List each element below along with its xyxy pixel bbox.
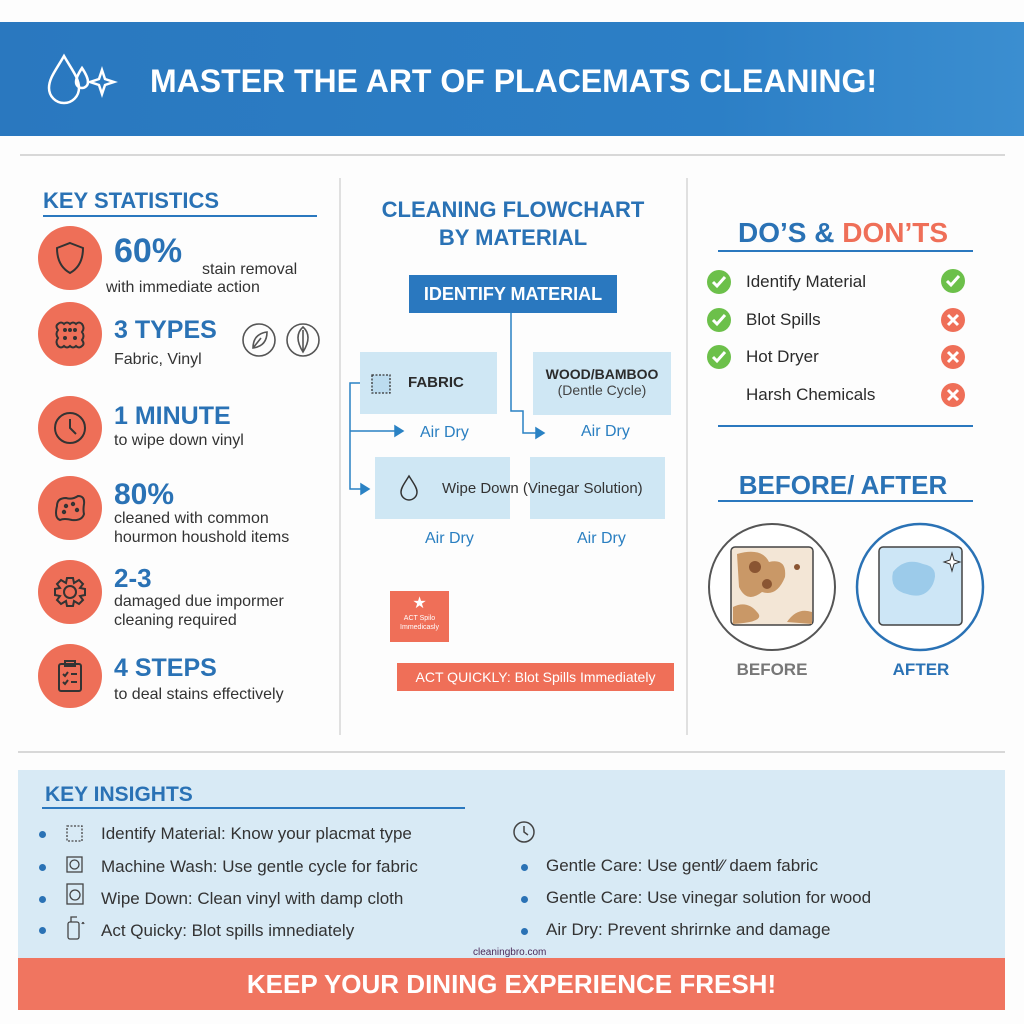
wipe down boxes: [375, 457, 510, 519]
panel: flowchart: Wipe Down (Vinegar Solution): [442, 480, 643, 497]
stat: 2-3: 2-3: [114, 563, 152, 593]
insight list right: Gentle Care: Use vinegar solution for wood: [546, 888, 871, 907]
do/don't rows: [707, 269, 965, 407]
panel: flowchart: Air Dry: [420, 424, 469, 441]
heading: key insights: KEY INSIGHTS: [45, 783, 193, 806]
stat: 60%: 60%: [114, 232, 182, 270]
stat: 3 types: [38, 302, 320, 368]
panel: flowchart: Air Dry: [581, 423, 630, 440]
fabric box: [360, 352, 497, 414]
stat: 1 minute: 1 MINUTE: [114, 402, 231, 430]
before image: BEFORE: [737, 660, 807, 679]
stat: 2-3: damaged due impormer: [114, 593, 284, 610]
wood box: WOOD/BAMBOO: [546, 366, 658, 382]
panel: key insights: [18, 770, 1005, 958]
act quickly bar: ACT QUICKLY: Blot Spills Immediately: [416, 669, 655, 685]
identify material box: IDENTIFY MATERIAL: [424, 284, 602, 304]
after image: AFTER: [893, 660, 949, 679]
stat: 3 types: 3 TYPES: [114, 316, 217, 344]
stat: 2-3: cleaning required: [114, 612, 237, 629]
stat: 80%: 80%: [114, 478, 174, 511]
stat: 1 minute: to wipe down vinyl: [114, 432, 244, 449]
panel: flowchart: [349, 197, 674, 691]
stat: 4 steps: 4 STEPS: [114, 654, 217, 682]
star callout: Immedicasly: [400, 624, 439, 631]
connectors: [349, 313, 546, 496]
wood box: (Dentle Cycle): [558, 382, 646, 398]
stat: 3 types: Fabric, Vinyl: [114, 351, 202, 368]
after image: [856, 522, 984, 679]
wood box: [533, 352, 671, 415]
heading: flowchart: BY MATERIAL: [439, 225, 587, 250]
title: MASTER THE ART OF PLACEMATS CLEANING!: [150, 63, 877, 99]
stat: 80%: cleaned with common: [114, 510, 269, 527]
panel: flowchart: Air Dry: [425, 530, 474, 547]
do/don't rows: Identify Material: [746, 272, 866, 291]
do/don't rows: Harsh Chemicals: [746, 385, 875, 404]
stat: 1 minute: [38, 396, 244, 460]
star callout: ★: [412, 595, 427, 612]
stat: 60%: stain removal: [202, 261, 297, 278]
header banner: [0, 22, 1024, 136]
before image: [708, 523, 836, 679]
insight list left: Wipe Down: Clean vinyl with damp cloth: [101, 889, 403, 908]
insight list left: Act Quicky: Blot spills imnediately: [101, 921, 354, 940]
stat: 2-3: [38, 560, 284, 629]
insight list left: Identify Material: Know your placmat type: [101, 824, 412, 843]
do/don't rows: Blot Spills: [746, 310, 821, 329]
star callout: ACT Spilo: [404, 615, 435, 622]
stat: 80%: hourmon houshold items: [114, 529, 289, 546]
heading: key statistics: KEY STATISTICS: [43, 188, 219, 213]
heading: before/after: BEFORE/ AFTER: [739, 470, 947, 500]
panel: flowchart: Air Dry: [577, 530, 626, 547]
act quickly bar: [397, 663, 674, 691]
stat: 4 steps: to deal stains effectively: [114, 686, 284, 703]
do/don't rows: Hot Dryer: [746, 347, 819, 366]
stat: 4 steps: [38, 644, 284, 708]
footer banner: KEEP YOUR DINING EXPERIENCE FRESH!: [247, 969, 776, 999]
insight list left: Machine Wash: Use gentle cycle for fabric: [101, 857, 418, 876]
heading: flowchart: CLEANING FLOWCHART: [382, 197, 644, 222]
fabric box: FABRIC: [408, 374, 464, 391]
heading: DO’S & DON’TS: [738, 217, 948, 248]
insight list right: Gentle Care: Use gentl⁄⁄ daem fabric: [546, 856, 818, 875]
icon: water drops: [48, 54, 118, 104]
footer banner: [18, 958, 1005, 1010]
heading: flowchart: [382, 197, 644, 250]
stat: 60%: [38, 226, 297, 296]
stat: 80%: [38, 476, 289, 546]
stat: 60%: with immediate action: [106, 279, 260, 296]
watermark: cleaningbro.com: [473, 947, 546, 958]
insight list right: Air Dry: Prevent shrirnke and damage: [546, 920, 830, 939]
insight list left: [39, 824, 418, 940]
insight list right: [513, 821, 871, 939]
identify material box: [409, 275, 617, 313]
star callout: [390, 591, 449, 642]
